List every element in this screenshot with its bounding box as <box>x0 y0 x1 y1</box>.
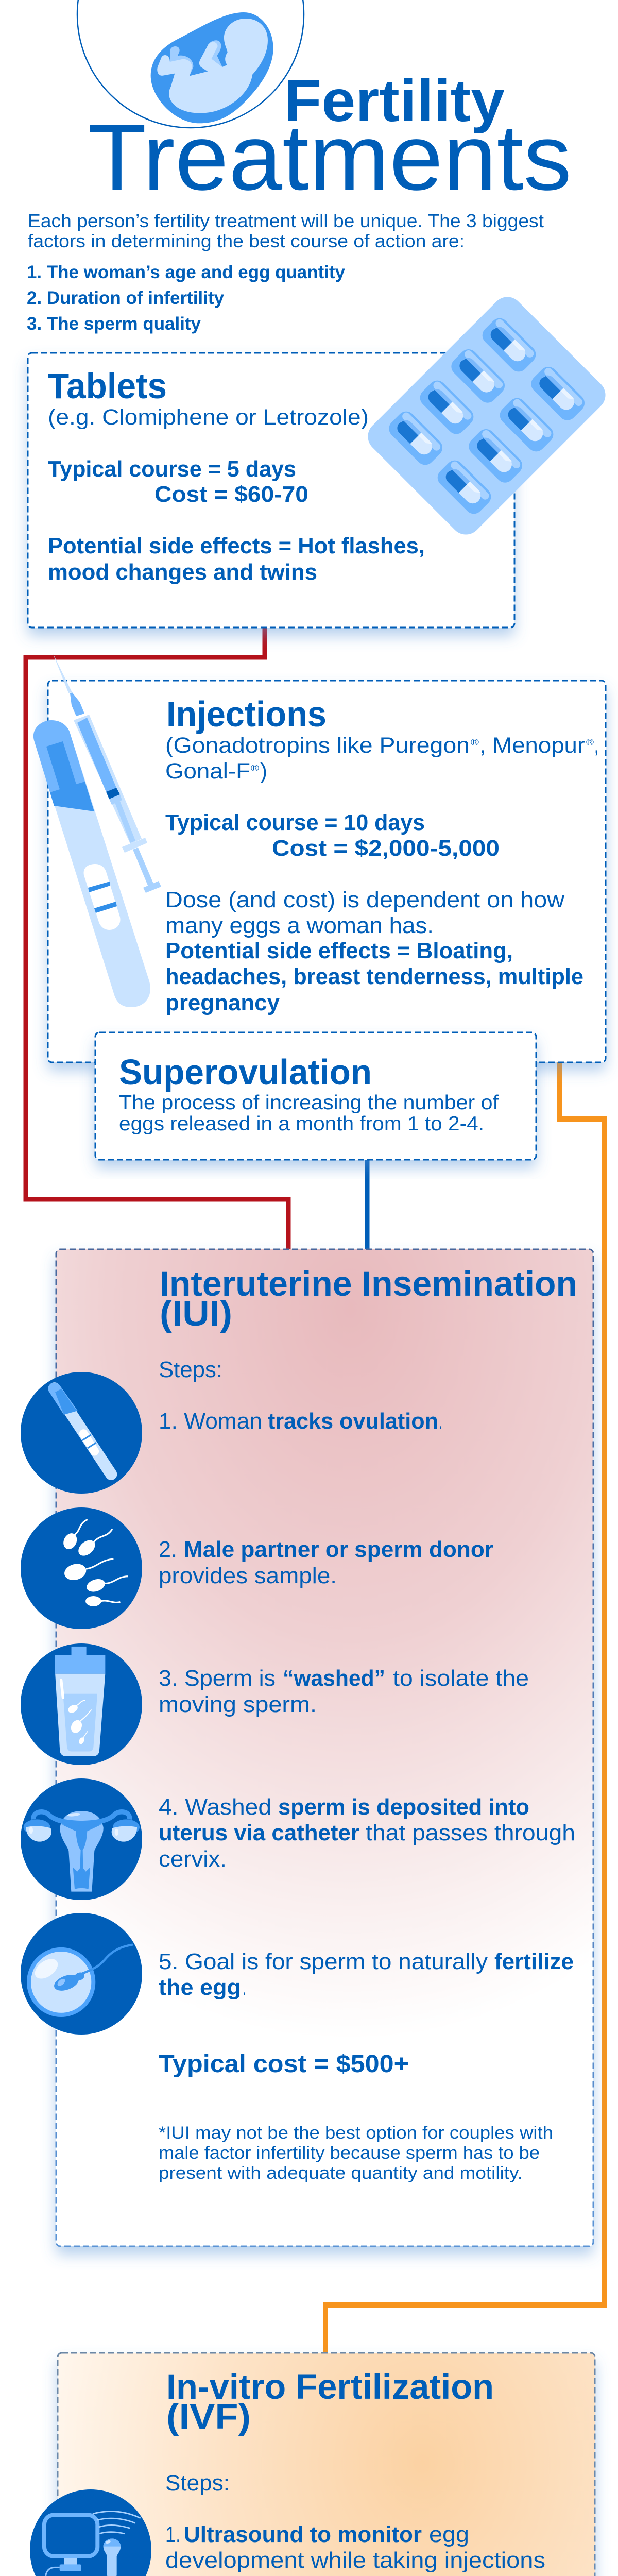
injections course and cost <box>165 810 500 861</box>
icon: blister pack <box>362 291 612 541</box>
superovulation description: The process of increasing the number of <box>119 1092 499 1114</box>
IUI step 5: . <box>243 1975 246 2000</box>
panel: IVF <box>58 2353 595 2576</box>
IUI step 4: that passes through <box>366 1820 575 1845</box>
IUI step 2: provides sample. <box>159 1563 337 1588</box>
IUI steps label: Steps: <box>159 1357 222 1382</box>
IUI step 4: 4. Washed <box>159 1794 271 1820</box>
IVF steps label: Steps: <box>165 2470 230 2496</box>
injections examples: ® <box>471 737 479 748</box>
injections course and cost: Cost = $2,000-5,000 <box>272 836 500 861</box>
IVF step 1: Ultrasound to monitor <box>184 2522 422 2547</box>
tablets side effects: mood changes and twins <box>48 560 317 585</box>
panel: IUI <box>56 1249 593 2246</box>
IUI step 4: uterus via catheter <box>159 1820 359 1845</box>
injections examples: (Gonadotropins like Puregon <box>165 733 470 758</box>
injections dose note: Dose (and cost) is dependent on how <box>165 887 564 912</box>
IVF step 1: 1. <box>165 2522 181 2547</box>
injections course and cost: Typical course = 10 days <box>165 810 425 835</box>
IUI step 3: moving sperm. <box>159 1692 317 1717</box>
intro text <box>28 210 544 251</box>
list of three factors: 1. The woman’s age and egg quantity <box>27 262 346 282</box>
header ring and embryo <box>77 0 304 128</box>
IUI step 3: to isolate the <box>393 1666 529 1691</box>
intro text: factors in determining the best course of action are: <box>28 230 465 251</box>
connector: blue line to IUI <box>365 1154 370 1252</box>
injections side effects <box>165 938 583 1015</box>
intro text: Each person’s fertility treatment will be unique. The 3 biggest <box>28 210 544 231</box>
IUI step 3 <box>159 1666 529 1717</box>
injections side effects: Potential side effects = Bloating, <box>165 938 513 963</box>
connector: red line to IUI <box>26 623 288 1252</box>
icon: sperm <box>21 1507 142 1629</box>
icon: ultrasound machine <box>30 2489 151 2576</box>
IUI step 1: 1. Woman <box>159 1409 262 1434</box>
IUI step 4 <box>159 1794 575 1872</box>
icon: syringe <box>53 653 161 893</box>
IVF step 1: egg <box>429 2522 469 2547</box>
injections examples second line: ) <box>260 759 267 784</box>
tablets side effects: Potential side effects = Hot flashes, <box>48 533 425 558</box>
list of three factors: 3. The sperm quality <box>27 314 201 334</box>
IUI step 5: fertilize <box>494 1949 574 1974</box>
icon: uterus with catheter <box>21 1778 142 1900</box>
heading: IVF <box>166 2367 494 2436</box>
IUI typical cost: Typical cost = $500+ <box>159 2050 409 2078</box>
superovulation description <box>119 1092 499 1135</box>
tablets course and cost <box>48 456 308 507</box>
title: Treatments <box>88 105 572 210</box>
IUI step 1: . <box>439 1409 442 1434</box>
IUI step 5: 5. Goal is for sperm to naturally <box>159 1949 488 1974</box>
IVF step 1: development while taking injections <box>165 2548 545 2573</box>
injections side effects: headaches, breast tenderness, multiple <box>165 964 583 989</box>
heading: superovulation: Superovulation <box>119 1052 372 1092</box>
injections examples: , Menopur <box>479 733 585 758</box>
panel: injections <box>48 681 606 1062</box>
IUI step 5: the egg <box>159 1975 241 2000</box>
injections dose note <box>165 887 564 938</box>
IUI step 2: 2. <box>159 1537 177 1562</box>
IUI footnote: present with adequate quantity and motility. <box>159 2163 523 2183</box>
heading: IVF: (IVF) <box>166 2397 251 2436</box>
icon: ovulation test <box>21 1372 142 1494</box>
icon: embryo <box>151 12 273 123</box>
IUI step 1: tracks ovulation <box>268 1409 438 1434</box>
panel: superovulation <box>95 1032 536 1160</box>
injections examples: ® <box>586 737 594 748</box>
injections side effects: pregnancy <box>165 990 280 1015</box>
tablets course and cost: Typical course = 5 days <box>48 456 296 482</box>
heading: IVF: In-vitro Fertilization <box>166 2367 494 2406</box>
injections examples second line: ® <box>251 763 259 773</box>
heading: injections: Injections <box>166 694 327 734</box>
title: Fertility <box>284 68 505 134</box>
tablets course and cost: Cost = $60-70 <box>154 482 308 507</box>
IUI footnote <box>159 2123 553 2183</box>
icon: sperm wash cup <box>21 1643 142 1765</box>
IUI step 4: sperm is deposited into <box>278 1794 529 1820</box>
tablets examples: (e.g. Clomiphene or Letrozole) <box>48 405 369 430</box>
IUI footnote: *IUI may not be the best option for couples with <box>159 2123 553 2143</box>
heading: tablets: Tablets <box>48 366 167 406</box>
IUI step 4: cervix. <box>159 1846 227 1872</box>
IUI step 2: Male partner or sperm donor <box>184 1537 493 1562</box>
heading: IUI: (IUI) <box>160 1294 232 1333</box>
tablets side effects <box>48 533 425 585</box>
icon: sperm meeting egg <box>21 1913 142 2035</box>
IUI step 2 <box>159 1537 493 1588</box>
injections examples second line: Gonal-F <box>165 759 250 784</box>
injections examples: , <box>594 733 598 758</box>
list of three factors: 2. Duration of infertility <box>27 288 225 308</box>
panel: tablets <box>28 353 514 628</box>
icon: injection pen <box>33 720 150 1007</box>
connector: orange line to IVF <box>325 1059 605 2354</box>
IUI step 3: 3. Sperm is <box>159 1666 276 1691</box>
list of three factors <box>27 262 346 334</box>
IUI footnote: male factor infertility because sperm has to be <box>159 2143 540 2163</box>
IVF step 1 <box>165 2522 565 2576</box>
heading: IUI: Interuterine Insemination <box>160 1264 577 1303</box>
injections dose note: many eggs a woman has. <box>165 913 434 938</box>
superovulation description: eggs released in a month from 1 to 2-4. <box>119 1113 484 1135</box>
heading: IUI <box>160 1264 577 1333</box>
IUI step 3: “washed” <box>283 1666 385 1691</box>
IUI step 5 <box>159 1949 574 2000</box>
